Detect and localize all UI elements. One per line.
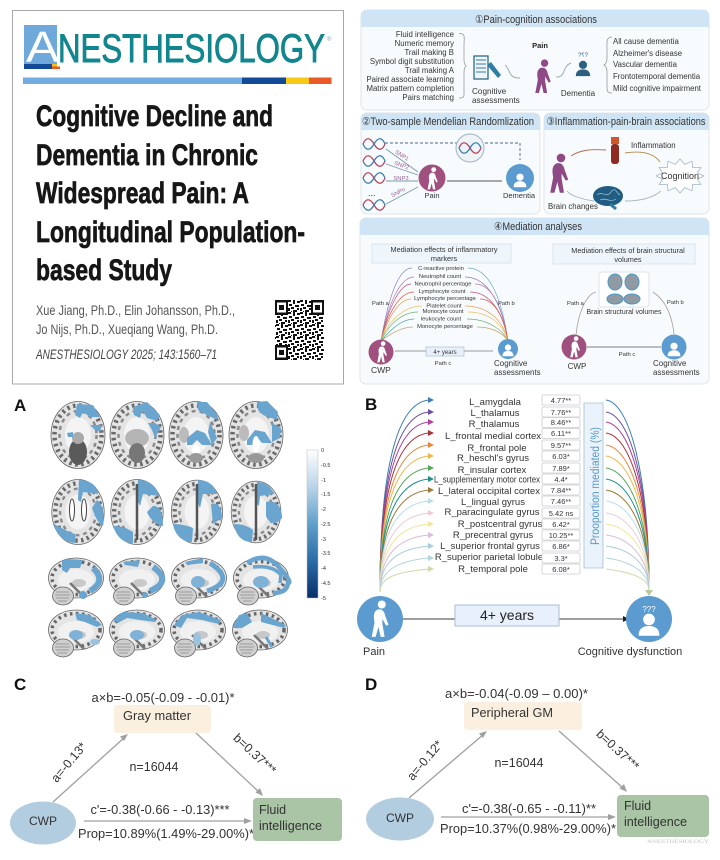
- panel label A: A: [14, 396, 26, 415]
- SNP labels: SNPn: [390, 187, 407, 199]
- outcome box: [253, 798, 342, 841]
- cognitive test list: Pairs matching: [402, 93, 454, 102]
- proportion values: 7.76**: [551, 408, 571, 417]
- outcome box: intelligence: [259, 819, 322, 833]
- watermark: ANESTHESIOLOGY: [647, 839, 709, 845]
- brace: [459, 33, 466, 98]
- cognitive test list: Fluid intelligence: [396, 30, 454, 39]
- colour scale: -2.5: [321, 522, 330, 528]
- proportion values: 10.25**: [549, 531, 573, 540]
- inflammatory marker labels: leukocyte count: [421, 316, 462, 322]
- panel label B: B: [365, 395, 377, 414]
- mediator box: Peripheral GM: [471, 706, 553, 720]
- dementia label: Dementia: [561, 89, 596, 98]
- icon: clipboard assessment: [474, 56, 501, 79]
- icon: DNA inset: [456, 134, 484, 162]
- proportion mediated bar: Prooportion mediated (%): [590, 427, 602, 545]
- mediator box: Gray matter: [123, 709, 191, 723]
- inflammatory marker labels: Monocyte percentage: [417, 324, 473, 330]
- node labels: Dementia: [503, 191, 536, 200]
- proportion value boxes: [542, 395, 580, 574]
- outcome box: Fluid: [259, 803, 286, 817]
- assessment node right: [662, 334, 686, 360]
- colour scale: [307, 448, 330, 602]
- proportion values: 5.42 ns: [549, 509, 574, 518]
- brace: [604, 37, 612, 93]
- path b label: b=0.37***: [231, 731, 279, 777]
- curves from pain: [380, 400, 429, 592]
- direct effect: c'=-0.38(-0.66 - -0.13)***: [90, 803, 230, 817]
- article title: [36, 100, 305, 287]
- path c left: [395, 350, 493, 352]
- ellipsis: ...: [368, 188, 376, 198]
- icon: brain: [593, 186, 623, 209]
- brain region labels: L_lingual gyrus: [461, 497, 525, 508]
- proportion values: 7.46**: [551, 497, 571, 506]
- SNP arrows: [386, 149, 418, 204]
- cognitive dysfunction label: Cognitive dysfunction: [578, 646, 682, 658]
- brain region labels: R_frontal pole: [467, 443, 527, 454]
- colour scale: 0: [321, 448, 324, 454]
- cognitive test list: Trail making A: [405, 66, 455, 75]
- brain region labels: R_insular cortex: [458, 465, 527, 476]
- subheading: inflammatory markers: markers: [431, 254, 458, 263]
- node labels: Pain: [424, 191, 440, 200]
- axial slices row 1: [51, 401, 283, 468]
- subheading: inflammatory markers: Mediation effects of inflammatory: [391, 245, 498, 254]
- subheading: brain volumes: [553, 244, 695, 264]
- inflammatory marker labels: Neutrophil percentage: [414, 282, 472, 288]
- cognitive test list: Symbol digit substitution: [370, 57, 454, 66]
- arrow to assessment: [505, 65, 520, 78]
- assessment label left: Cognitive: [494, 359, 528, 368]
- dementia type list: All cause dementia: [613, 37, 680, 46]
- panel B: mediation diagram: [357, 395, 682, 658]
- brain region labels: L_superior frontal gyrus: [440, 541, 540, 552]
- panel: 1 pain-cognition associations: [361, 10, 709, 110]
- path labels left: [372, 301, 515, 307]
- proportion values: 7.89*: [552, 464, 570, 473]
- assessment label right: Cognitive: [653, 359, 687, 368]
- proportion values: 6.42*: [552, 520, 570, 529]
- mediator curves: [381, 268, 508, 341]
- QR code: [275, 300, 324, 360]
- brain region labels: R_superior parietal lobule: [435, 552, 543, 563]
- panel D: peripheral GM mediation: [366, 687, 709, 840]
- path labels right: [567, 300, 684, 358]
- assessment label left: assessments: [494, 368, 541, 377]
- dementia type list: Frontotemporal dementia: [613, 72, 701, 81]
- path labels right: Path b: [667, 300, 684, 306]
- panel: 2 Mendelian randomization: [361, 113, 540, 214]
- path b label: b=0.37***: [594, 727, 642, 773]
- duration box: 4+ years: [480, 607, 534, 623]
- CWP node: CWP: [386, 811, 414, 825]
- heading: ④Mediation analyses: [494, 221, 582, 233]
- brain region labels: R_temporal pole: [458, 564, 528, 575]
- inflammatory marker labels: Lymphocyte percentage: [414, 296, 476, 302]
- dementia type list: Mild cognitive impairment: [613, 84, 702, 93]
- assessment label: Cognitive: [472, 87, 507, 96]
- brain region labels: L_supplementary motor cortex: [434, 474, 540, 486]
- panel: 3 inflammation-pain-brain: [544, 113, 709, 214]
- dashed pleiotropy path: [385, 143, 520, 160]
- citation: ANESTHESIOLOGY 2025; 143:1560–71: [35, 347, 217, 362]
- dementia type list: Vascular dementia: [613, 60, 678, 69]
- proportion mediated: Prop=10.37%(0.98%-29.00%)*: [440, 822, 616, 836]
- subheading: inflammatory markers: [372, 244, 511, 263]
- indirect effect: a×b=-0.05(-0.09 - -0.01)*: [92, 691, 235, 705]
- heading: ①Pain-cognition associations: [475, 14, 597, 26]
- path labels left: Path a: [372, 301, 390, 307]
- journal logo: ®: [327, 36, 332, 43]
- brain region labels: [434, 397, 543, 575]
- icon: dementia person: [576, 52, 590, 76]
- curves to cognitive dysfunction: [606, 400, 653, 596]
- brain region labels: R_postcentral gyrus: [458, 519, 542, 530]
- assessment node left: [498, 339, 518, 359]
- outcome box: Fluid: [624, 799, 651, 813]
- path arrows right: [576, 292, 674, 335]
- assessment label right: assessments: [653, 368, 700, 377]
- proportion values: 3.3*: [554, 554, 568, 563]
- journal logo: NESTHESIOLOGY: [58, 27, 325, 71]
- CWP node: [10, 802, 76, 844]
- inflammatory marker labels: Monocyte count: [423, 309, 464, 315]
- cognitive test list: Numeric memory: [395, 39, 454, 48]
- icon: pain figure: [550, 154, 568, 193]
- journal logo: [24, 23, 332, 72]
- brain volumes label: Brain structural volumes: [586, 309, 662, 316]
- CWP node right: [562, 334, 586, 360]
- colour scale: -1.5: [321, 492, 330, 498]
- brain region labels: R_thalamus: [469, 419, 520, 430]
- indirect effect: a×b=-0.04(-0.09 – 0.00)*: [445, 687, 588, 701]
- colour scale: -5: [321, 596, 326, 602]
- icon: dementia node: [506, 164, 534, 192]
- assessment label: [472, 87, 520, 105]
- panel: 4 mediation analyses: [360, 218, 709, 384]
- SNP labels: SNP1: [394, 150, 410, 163]
- proportion values: 6.08*: [552, 565, 570, 574]
- brain region labels: R_precentral gyrus: [453, 530, 533, 541]
- colour rule: [23, 78, 332, 84]
- colour scale: -4: [321, 566, 326, 572]
- proportion values: 6.11**: [551, 429, 571, 438]
- arrows: [409, 731, 627, 820]
- inflammatory marker labels: C-reactive protein: [418, 266, 464, 272]
- cognition starburst: Cognition: [661, 171, 699, 181]
- duration box: 4+ years: [433, 350, 457, 356]
- assessment label: assessments: [472, 96, 520, 105]
- proportion values: [549, 396, 574, 574]
- subheading: brain volumes: Mediation effects of brain structural: [571, 246, 685, 255]
- sagittal slices row 3: [48, 558, 289, 605]
- sample size: n=16044: [129, 760, 179, 774]
- heading: ②Two-sample Mendelian Randomlization: [362, 116, 534, 128]
- pain label: Pain: [532, 41, 548, 50]
- cognition starburst: [656, 159, 704, 193]
- path a label: a=-0.13*: [48, 740, 90, 785]
- proportion values: 4.77**: [551, 396, 571, 405]
- icon: pain node: [418, 164, 446, 192]
- sagittal slices row 4: [48, 610, 288, 657]
- path a label: a=-0.12*: [404, 738, 446, 783]
- brain region labels: L_thalamus: [470, 408, 520, 419]
- journal logo: A: [26, 23, 60, 72]
- colour scale: -3: [321, 537, 326, 543]
- colour scale: -0.5: [321, 463, 330, 469]
- colour scale: -2: [321, 507, 326, 513]
- colour scale: -4.5: [321, 581, 330, 587]
- assessment label left: [494, 359, 541, 377]
- arrows: [53, 733, 263, 824]
- path labels right: Path c: [619, 352, 635, 358]
- arrow to dementia: [556, 63, 571, 77]
- node labels: [424, 191, 536, 200]
- panel label C: C: [14, 675, 26, 694]
- proportion values: 6.03*: [552, 452, 570, 461]
- SNP labels: SNP2: [393, 161, 409, 171]
- SNP labels: SNP3: [393, 176, 409, 182]
- outcome box: [617, 795, 709, 837]
- outcome box: intelligence: [624, 815, 687, 829]
- cognitive test list: Matrix pattern completion: [366, 84, 454, 93]
- cognitive test list: [366, 30, 455, 102]
- brain region labels: L_lateral occipital cortex: [438, 486, 540, 497]
- authors: Jo Nijs, Ph.D., Xueqiang Wang, Ph.D.: [36, 321, 218, 337]
- path c right: [587, 346, 661, 348]
- subheading: brain volumes: volumes: [614, 255, 642, 264]
- inflammatory marker labels: Platelet count: [426, 304, 462, 310]
- brain region labels: L_amygdala: [469, 397, 522, 408]
- CWP label left: CWP: [371, 365, 391, 375]
- panel A: brain maps: [48, 401, 289, 657]
- proportion values: 7.84**: [551, 486, 571, 495]
- mediator box: [114, 705, 211, 733]
- duration box: [455, 605, 559, 626]
- proportion values: 8.46**: [551, 418, 571, 427]
- authors: [36, 302, 235, 337]
- brain region labels: R_paracingulate gyrus: [444, 507, 540, 518]
- path labels left: Path b: [498, 301, 515, 307]
- inflammatory marker labels: Lymphocyte count: [419, 289, 466, 295]
- panel: journal title card: [12, 10, 344, 384]
- axial slices row 2: [52, 480, 282, 544]
- icon: blood tube: [611, 137, 619, 164]
- inflammatory marker labels: [414, 266, 476, 330]
- icon: pain figure: [535, 59, 551, 93]
- panel C: gray matter mediation: [10, 691, 342, 844]
- brain volumes box: [599, 272, 649, 307]
- brain changes label: Brain changes: [548, 202, 598, 211]
- arrow: pain to dementia: [447, 180, 502, 182]
- cognitive test list: Trail making B: [404, 48, 454, 57]
- assessment label right: [653, 359, 700, 377]
- inflammatory marker labels: Neutrophil count: [419, 274, 461, 280]
- article title: based Study: [36, 254, 172, 287]
- cycle arrows: [567, 150, 661, 201]
- CWP node left: [368, 340, 394, 364]
- arrowheads: [428, 397, 434, 572]
- mediator box: [464, 702, 582, 730]
- article title: Widespread Pain: A: [36, 177, 249, 210]
- dementia type list: [613, 37, 702, 93]
- colour scale: -3.5: [321, 551, 330, 557]
- duration box: [426, 347, 464, 356]
- cognitive dysfunction node: ???: [642, 605, 656, 614]
- proportion values: 9.57**: [551, 441, 571, 450]
- CWP label right: CWP: [568, 362, 586, 371]
- proportion values: 4.4*: [554, 475, 568, 484]
- CWP node: [366, 798, 434, 840]
- brain region labels: L_frontal medial cortex: [445, 431, 541, 442]
- cognitive dysfunction node: [626, 596, 672, 642]
- icons: DNA instruments: [363, 139, 385, 210]
- sample size: n=16044: [494, 756, 544, 770]
- colour scale: -1: [321, 478, 326, 484]
- path c label left: Path c: [435, 361, 451, 367]
- pain node: [357, 596, 403, 642]
- dementia type list: Alzheimer's disease: [613, 49, 682, 58]
- timeline arrow: [403, 616, 629, 622]
- proportion mediated: Prop=10.89%(1.49%-29.00%)*: [78, 827, 254, 841]
- path labels right: Path a: [567, 301, 585, 307]
- icon: dementia person: ?؟?: [578, 52, 589, 59]
- SNP labels: [390, 150, 410, 199]
- inflammation label: Inflammation: [631, 141, 676, 150]
- pain label: Pain: [363, 646, 385, 658]
- proportion values: 6.86*: [552, 542, 570, 551]
- authors: Xue Jiang, Ph.D., Elin Johansson, Ph.D.,: [36, 302, 235, 318]
- CWP node: CWP: [29, 814, 57, 828]
- panel label D: D: [365, 675, 377, 694]
- article title: Dementia in Chronic: [36, 139, 258, 172]
- brain region labels: R_heschl's gyrus: [457, 453, 529, 464]
- direct effect: c'=-0.38(-0.65 - -0.11)**: [462, 802, 596, 816]
- proportion mediated bar: [584, 403, 603, 568]
- article title: Cognitive Decline and: [36, 100, 273, 133]
- article title: Longitudinal Population-: [36, 216, 305, 249]
- cognitive test list: Paired associate learning: [366, 75, 454, 84]
